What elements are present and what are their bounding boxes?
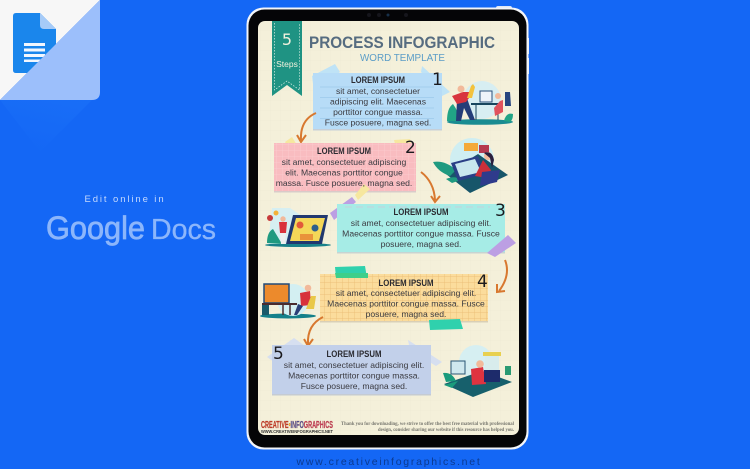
footer note bbox=[341, 422, 515, 433]
step 5 card: Maecenas porttitor congue massa. bbox=[288, 370, 420, 380]
tablet bbox=[246, 6, 529, 450]
step 4 card bbox=[320, 266, 488, 330]
illustration: man at computer bbox=[260, 284, 316, 318]
step 4 card: posuere, magna sed. bbox=[366, 309, 446, 319]
step 4 card: Maecenas porttitor congue massa. Fusce bbox=[327, 298, 485, 308]
arrow 2 to 3 bbox=[421, 172, 440, 202]
text: Edit online in: Edit online in bbox=[84, 194, 166, 205]
footer logo: WWW.CREATIVEINFOGRAPHICS.NET bbox=[261, 429, 333, 434]
footer logo: CREATIVE•INFOGRAPHICS bbox=[261, 419, 333, 431]
step 3 card bbox=[330, 197, 516, 257]
step 3 card: Maecenas porttitor congue massa. Fusce bbox=[342, 228, 500, 238]
step 2 card: LOREM IPSUM bbox=[317, 146, 371, 156]
step 1 card: 1 bbox=[432, 70, 443, 90]
footer logo bbox=[261, 419, 333, 434]
step 3 card: LOREM IPSUM bbox=[394, 207, 448, 217]
logo text: Google Docs: Docs bbox=[151, 214, 216, 246]
illustration: people at desk bbox=[447, 81, 513, 125]
step 5 card: sit amet, consectetuer adipiscing elit. bbox=[284, 360, 424, 370]
ribbon: 5 Steps bbox=[272, 21, 302, 96]
arrow 4 to 5 bbox=[304, 317, 323, 346]
icon: Google Docs file bbox=[13, 13, 56, 73]
footer note: Thank you for downloading, we strive to offer the best free material with professional bbox=[341, 422, 515, 427]
illustration: person at workstation bbox=[443, 345, 512, 397]
step 2 card bbox=[274, 137, 416, 200]
step 5 card: Fusce posuere, magna sed. bbox=[301, 381, 407, 391]
logo text: Google Docs: Google bbox=[46, 210, 145, 246]
logo text: Google Docs bbox=[46, 210, 216, 246]
illustration: designer and board bbox=[265, 208, 331, 247]
step 5 card bbox=[267, 338, 442, 396]
step 2 card: 2 bbox=[405, 138, 416, 158]
screen bbox=[258, 21, 519, 435]
step 1 card: sit amet, consectetuer bbox=[336, 86, 420, 96]
ribbon: 5 Steps: Steps bbox=[276, 59, 298, 69]
step 4 card: 4 bbox=[477, 272, 488, 292]
step 1 card: porttitor congue massa. bbox=[333, 107, 423, 117]
step 1 card: adipiscing elit. Maecenas bbox=[330, 96, 426, 106]
illustration: woman at screen bbox=[433, 138, 508, 193]
step 4 card: LOREM IPSUM bbox=[378, 278, 434, 288]
step 2 card: sit amet, consectetuer adipiscing bbox=[282, 157, 407, 167]
step 4 card: sit amet, consectetuer adipiscing elit. bbox=[336, 288, 476, 298]
arrow 3 to 4 bbox=[497, 260, 507, 292]
step 1 card: LOREM IPSUM bbox=[351, 75, 405, 85]
step 1 card: Fusce posuere, magna sed. bbox=[325, 118, 431, 128]
step 3 card: sit amet, consectetuer adipiscing elit. bbox=[351, 218, 491, 228]
corner page fold with Google Docs icon bbox=[0, 0, 100, 152]
step 2 card: elit. Maecenas porttitor congue bbox=[285, 168, 403, 178]
arrow 1 to 2 bbox=[297, 113, 316, 142]
step 2 card: massa. Fusce posuere, magna sed. bbox=[276, 178, 412, 188]
camera bbox=[367, 13, 408, 17]
title: PROCESS INFOGRAPHIC bbox=[309, 34, 495, 52]
step 5 card: LOREM IPSUM bbox=[326, 349, 382, 359]
ribbon: 5 Steps: 5 bbox=[282, 30, 292, 49]
footer note: design, consider sharing our website if this resource has helped you. bbox=[378, 428, 514, 433]
website url: www.creativeinfographics.net bbox=[296, 456, 481, 468]
subtitle: WORD TEMPLATE bbox=[360, 52, 445, 64]
step 5 card: 5 bbox=[273, 344, 284, 364]
step 3 card: posuere, magna sed. bbox=[381, 239, 461, 249]
step 1 card bbox=[312, 64, 450, 130]
step 3 card: 3 bbox=[495, 201, 506, 221]
